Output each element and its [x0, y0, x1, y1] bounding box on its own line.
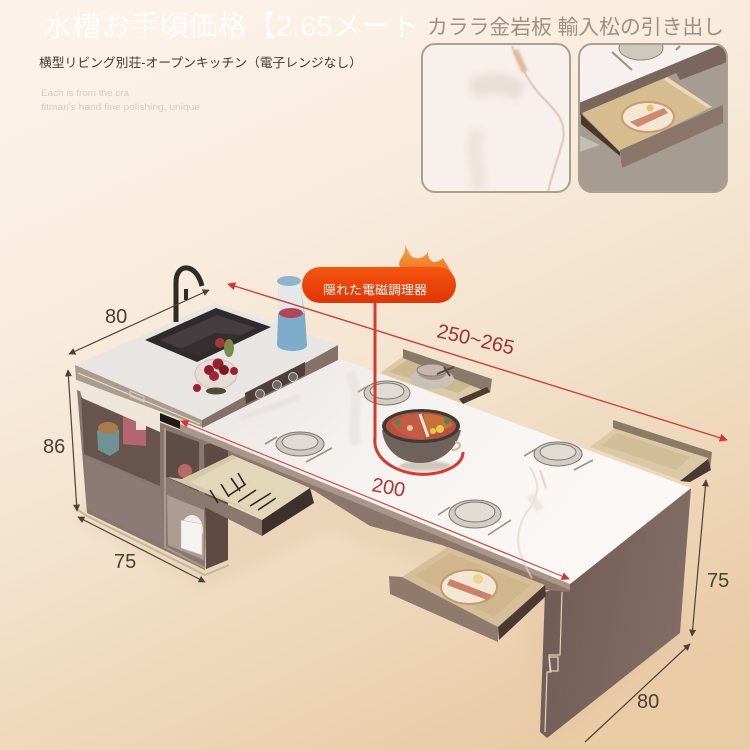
small English note [41, 88, 200, 112]
dimension labels: 80 [105, 306, 127, 328]
front drawer [389, 547, 546, 642]
table apron [180, 430, 570, 592]
width label: 200 [370, 474, 407, 502]
dimension arrow: 200 [181, 421, 569, 579]
cabinet [77, 390, 229, 575]
heading: materials: カララ金岩板 輸入松の引き出し [427, 16, 724, 39]
counter [75, 268, 338, 432]
dimension labels: 80 [637, 691, 659, 713]
subtitle: 横型リビング別荘-オープンキッチン（電子レンジなし） [39, 56, 362, 70]
dimension labels [43, 306, 729, 713]
pill label: 隠れた電磁調理器 [323, 283, 427, 297]
faucet [176, 268, 202, 322]
pill [302, 267, 456, 303]
dimension arrow: counter depth 80 [69, 290, 209, 354]
hidden induction cooker callout [302, 245, 463, 474]
hob knobs [245, 362, 305, 404]
sink [145, 308, 271, 362]
cutlery drawer [166, 455, 314, 536]
floor shadow [70, 380, 690, 745]
table top [180, 355, 691, 590]
panel: marble swatch [422, 44, 570, 192]
small English note: fitman's hand fine polishing, unique [41, 102, 200, 112]
leader line and ring [375, 302, 463, 474]
blender [277, 285, 307, 351]
hot pot [382, 409, 461, 471]
dimension arrow: height 75 [692, 480, 706, 636]
small English note: Each is from the cra [41, 88, 129, 98]
back-right drawer [590, 420, 712, 482]
panel: drawer photo [579, 36, 727, 192]
dimension arrow: leg 80 [585, 644, 690, 742]
flame [399, 245, 455, 282]
dimension labels: 75 [114, 551, 136, 573]
cherries bowl [195, 359, 237, 389]
dimension labels: 86 [43, 436, 65, 458]
dimension labels: 75 [707, 570, 729, 592]
plates on the table [265, 381, 593, 535]
table leg [540, 488, 691, 738]
box on shelf [97, 424, 119, 456]
dimension arrow: cabinet 75 [78, 517, 205, 582]
dimension arrow: height 86 [68, 370, 77, 511]
back-left drawer [380, 349, 492, 404]
length label: 250~265 [435, 320, 516, 360]
title: 水槽お手頃価格【2.65メート [43, 10, 420, 43]
dimension arrow: 250~265 [228, 284, 727, 440]
